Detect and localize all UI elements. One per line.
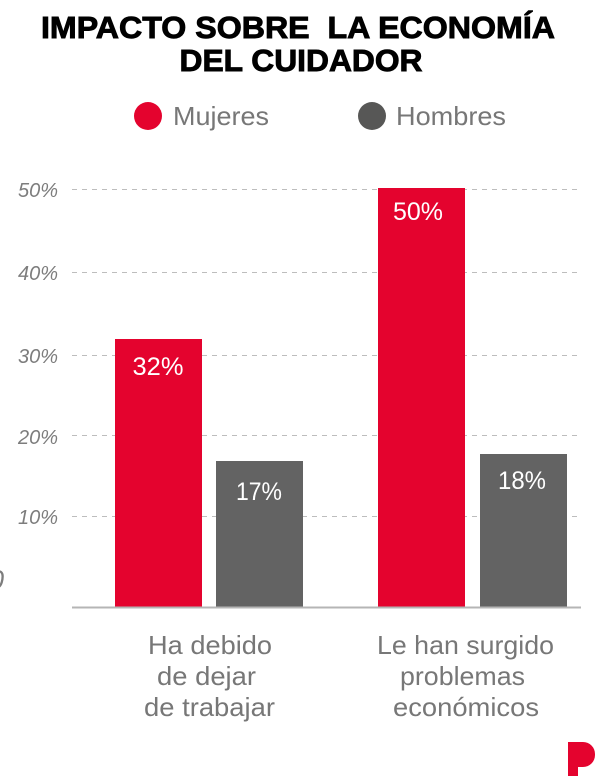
category label: dejar de trabajar: de dejar [157, 661, 256, 691]
bar values: 18% [498, 467, 546, 495]
category label: dejar de trabajar: de trabajar [144, 692, 275, 722]
y axis labels: 20% [17, 427, 58, 449]
icon: logo P [568, 742, 595, 776]
bar values [132, 198, 546, 506]
y axis labels: 50% [18, 180, 58, 202]
legend [134, 101, 506, 131]
legend item: Mujeres [134, 101, 269, 131]
bar values: 17% [236, 478, 282, 506]
baseline [72, 606, 581, 608]
title: IMPACTO SOBRE LA ECONOMÍA [41, 10, 555, 45]
legend item: Hombres: Hombres [396, 101, 506, 131]
title [41, 10, 555, 78]
category label: problemas económicos: problemas [400, 661, 525, 691]
bar: hombres, dejar de trabajar [216, 461, 303, 608]
category label: problemas económicos [377, 630, 554, 722]
bar: mujeres, dejar de trabajar [115, 339, 202, 608]
bar values: 32% [132, 353, 184, 381]
title: DEL CUIDADOR [180, 43, 422, 78]
bar values: 50% [393, 198, 443, 226]
y axis labels: 30% [18, 346, 58, 368]
category label: problemas económicos: Le han surgido [377, 630, 554, 660]
y axis labels [0, 180, 58, 595]
y axis labels: 10% [18, 507, 58, 529]
bar chart [0, 180, 582, 722]
bar: mujeres, problemas económicos [378, 188, 465, 608]
y axis labels: 40% [18, 263, 58, 285]
category label: dejar de trabajar: Ha debido [148, 630, 272, 660]
legend item: Mujeres: Mujeres [173, 101, 269, 131]
category label: problemas económicos: económicos [393, 692, 539, 722]
bar: hombres, problemas económicos [480, 454, 567, 608]
category label: dejar de trabajar [144, 630, 275, 722]
